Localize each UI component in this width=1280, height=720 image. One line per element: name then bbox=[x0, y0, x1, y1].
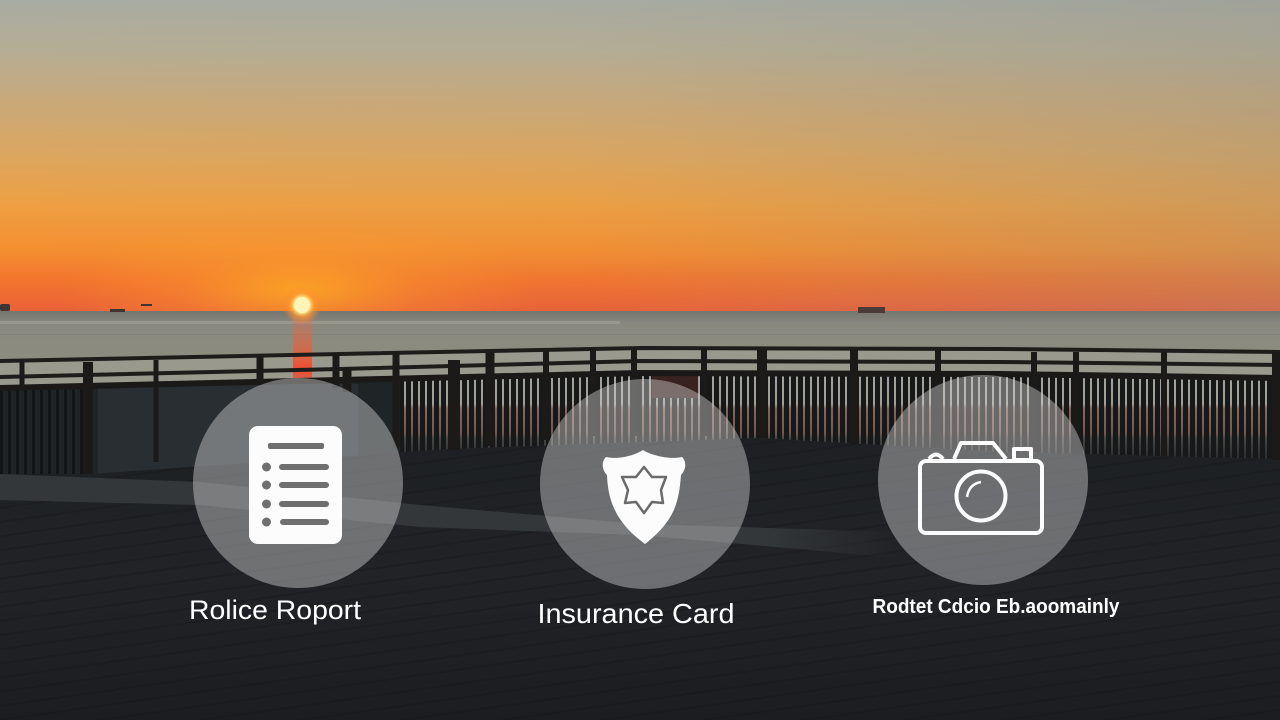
badge circle bbox=[878, 375, 1088, 585]
label: Insurance Card bbox=[538, 598, 734, 629]
sun bbox=[282, 285, 322, 325]
fence bbox=[0, 348, 1280, 475]
icon: shield bbox=[603, 450, 685, 544]
panel: insurance card bbox=[538, 379, 750, 629]
badge circle bbox=[540, 379, 750, 589]
deck floor bbox=[0, 430, 1280, 720]
badge circle bbox=[193, 378, 403, 588]
railings bbox=[0, 348, 1280, 361]
icon: document list bbox=[249, 426, 342, 544]
panel: police report bbox=[189, 378, 403, 625]
fence posts bbox=[22, 348, 1276, 474]
label: Rolice Roport bbox=[189, 595, 362, 625]
label: Rodtet Cdcio Eb.aoomainly bbox=[872, 596, 1120, 618]
icon: camera bbox=[920, 443, 1042, 533]
panel: photo documentation bbox=[872, 375, 1120, 618]
distant ships on the horizon bbox=[0, 304, 885, 313]
background: sea bbox=[0, 311, 1280, 388]
sun reflection bbox=[293, 316, 312, 382]
background: sunset sky bbox=[0, 0, 1280, 312]
